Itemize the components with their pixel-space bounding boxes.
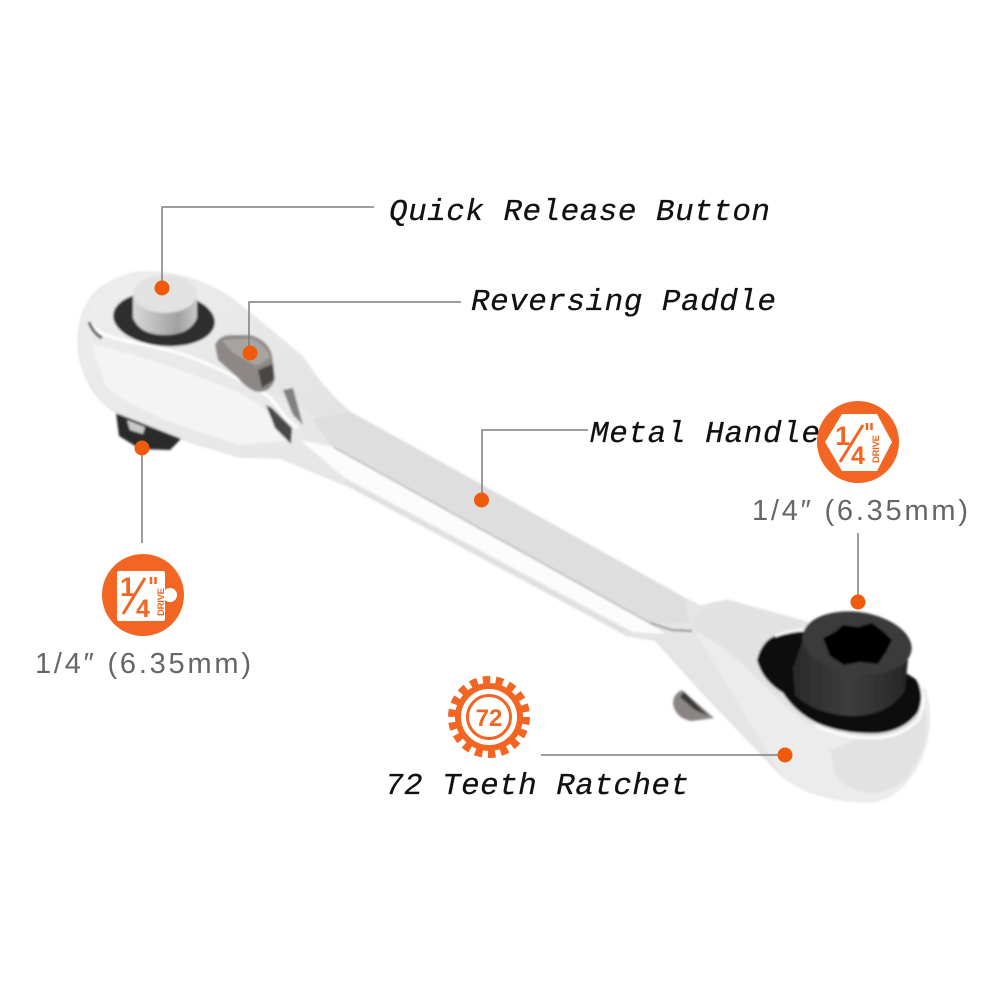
drive nub: left underside (116, 413, 181, 450)
callout: quick release button (154, 207, 374, 296)
quick release button (111, 275, 217, 350)
icon: square 1/4 drive (102, 554, 184, 636)
icon: hexagon 1/4 drive (817, 401, 899, 483)
wrench body (78, 272, 929, 802)
reversing paddle (215, 335, 275, 392)
wrench illustration (78, 272, 929, 802)
icon: hexagon 1/4 drive: 4 (851, 442, 865, 470)
handle bright bevel (300, 440, 665, 634)
right head lower shading (695, 632, 929, 802)
text: right drive size: 1/4″ (6.35mm) (752, 495, 968, 527)
callout: metal handle (474, 430, 588, 508)
left head bright highlight (92, 345, 290, 445)
handle edge shadow line (333, 447, 650, 623)
callout: reversing paddle (242, 302, 461, 360)
left head chrome edge (90, 322, 298, 428)
icon: hexagon 1/4 drive: DRIVE (871, 435, 882, 463)
icon: 72 teeth gear: 72 (476, 705, 502, 732)
callout: right drive (850, 533, 866, 610)
handle top face (312, 412, 690, 624)
label: quick release button: Quick Release Button (389, 195, 770, 230)
icon: square 1/4 drive: 4 (136, 595, 150, 623)
icon: 72 teeth gear (452, 680, 526, 754)
icon: square 1/4 drive: 1 (120, 572, 135, 602)
icon: hexagon 1/4 drive: 1 (835, 421, 850, 451)
callout: 72 teeth ratchet (541, 748, 792, 762)
label: reversing paddle: Reversing Paddle (471, 285, 776, 320)
label: 72 teeth ratchet: 72 Teeth Ratchet (385, 769, 689, 804)
black socket drive (757, 605, 923, 738)
handle lower edge stripe (345, 482, 630, 635)
callout: left drive (134, 440, 150, 543)
icon: square 1/4 drive: DRIVE (156, 588, 167, 616)
top face of left head (92, 272, 350, 425)
right head top face (690, 600, 815, 745)
label: metal handle: Metal Handle (590, 417, 820, 452)
text: left drive size: 1/4″ (6.35mm) (35, 648, 251, 680)
drive nub: right underside (673, 690, 714, 721)
dark reflection on neck (266, 405, 292, 444)
seam line right (650, 623, 692, 631)
